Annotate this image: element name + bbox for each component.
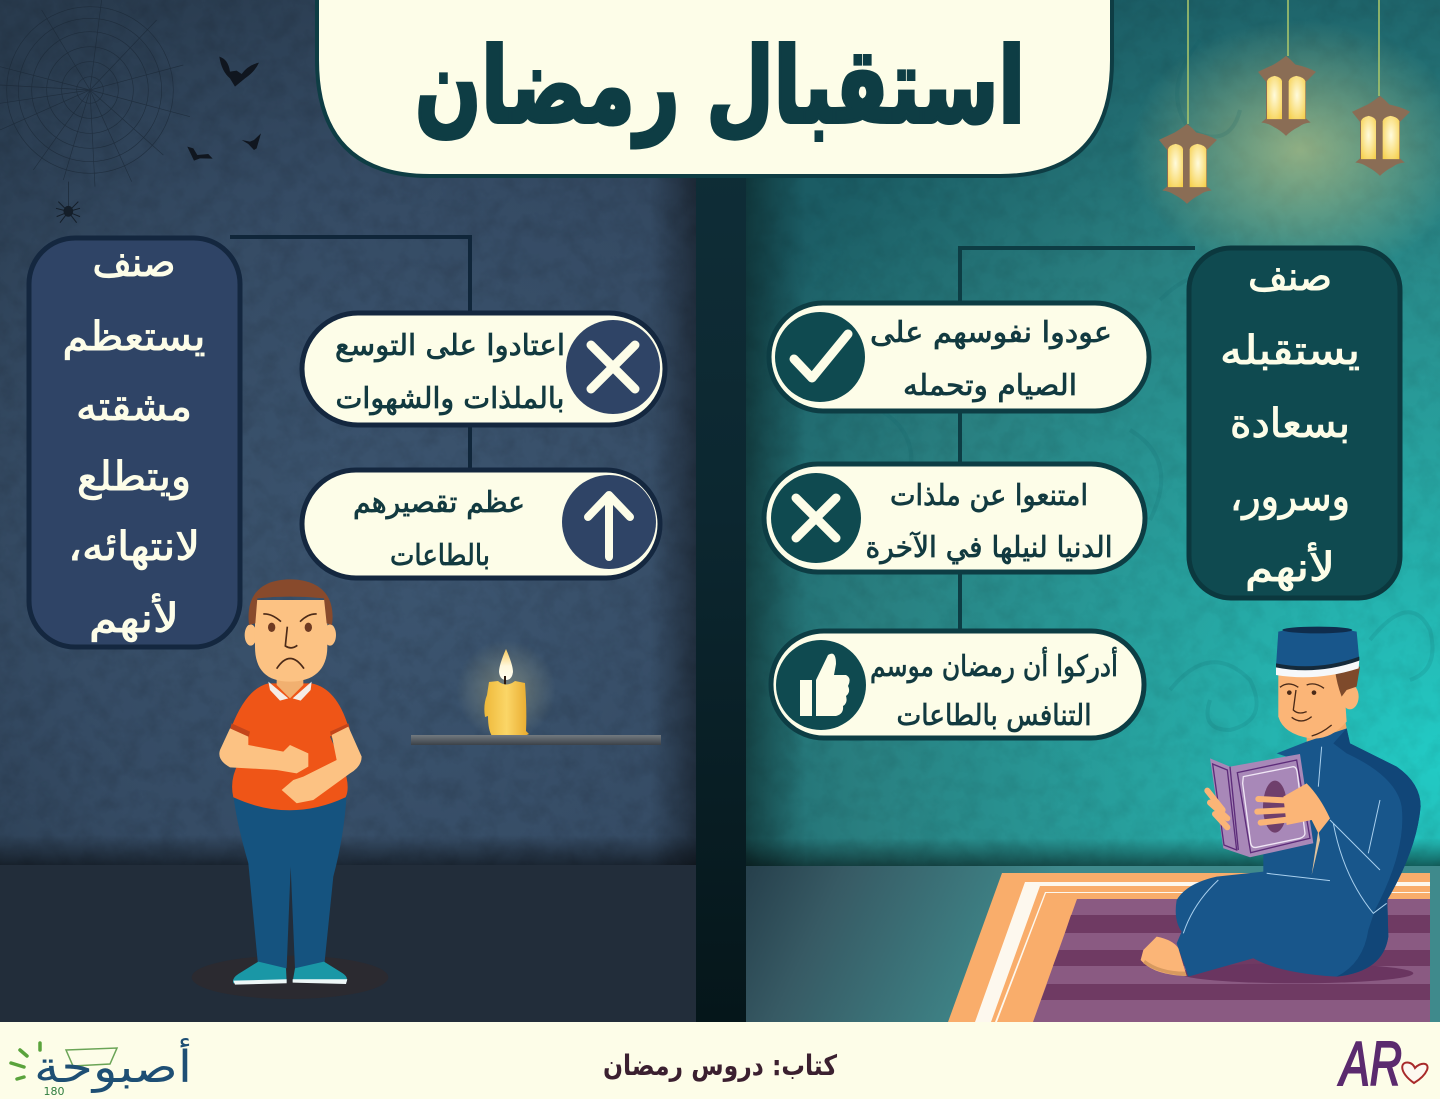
right floor [746, 866, 1440, 1022]
icon: spider [56, 182, 80, 223]
logo: left brand [11, 1038, 192, 1098]
icon: bats [187, 57, 261, 161]
pill: left item 1: بالملذات والشهوات [336, 381, 564, 415]
pill: right item 2: الدنيا لنيلها في الآخرة [866, 530, 1112, 565]
figure: man reading book [1141, 627, 1421, 983]
title: استقبال رمضان [415, 25, 1025, 147]
icon: lantern 2 [1258, 56, 1316, 136]
right teal wall [746, 0, 1440, 866]
connector lines left [230, 237, 470, 475]
pill: right item 2: امتنعوا عن ملذات [890, 478, 1088, 512]
panel: left category box [29, 238, 240, 647]
title plate [317, 0, 1112, 176]
logo: left brand: 180 [44, 1085, 64, 1098]
panel: left category box: صنف [92, 240, 176, 286]
lantern strings [1188, 0, 1379, 124]
central dark divider [696, 0, 746, 1022]
panel: left category box: يستعظم [62, 314, 205, 360]
left dark wall [0, 0, 697, 865]
panel: right category box [1189, 248, 1400, 598]
pill: left item 2: بالطاعات [390, 538, 490, 572]
panel: left category box: مشقته [76, 384, 192, 430]
candle on shelf [411, 640, 661, 745]
source text: كتاب: دروس رمضان [603, 1049, 838, 1082]
pill: left item 2: عظم تقصيرهم [353, 485, 525, 520]
pill: right item 3: أدركوا أن رمضان موسم [870, 646, 1118, 684]
panel: left category box: ويتطلع [77, 454, 191, 500]
footer band [0, 1022, 1440, 1099]
panel: right category box: يستقبله [1220, 328, 1360, 374]
pill: right item 3: التنافس بالطاعات [896, 698, 1092, 732]
carpet [948, 873, 1430, 1022]
panel: right category box: بسعادة [1230, 401, 1350, 447]
icon: lantern 1 [1159, 124, 1217, 204]
pill: right item 1: الصيام وتحمله [903, 368, 1077, 402]
panel: right category box: وسرور، [1230, 474, 1350, 520]
pill: right item 1: عودوا نفوسهم على [870, 315, 1112, 350]
panel: right category box: لأنهم [1245, 542, 1335, 591]
icon: lantern 3 [1352, 96, 1410, 176]
connector lines right [960, 248, 1195, 640]
panel: left category box: لأنهم [89, 593, 179, 642]
pill: right item 1 [769, 303, 1149, 411]
shelf [411, 735, 661, 745]
pill: left item 1: اعتادوا على التوسع [335, 328, 565, 362]
pill: left item 1 [302, 313, 665, 425]
figure: sad overweight man [192, 579, 388, 999]
panel: left category box: لانتهائه، [68, 524, 200, 570]
pill: right item 3 [771, 631, 1144, 738]
spider web [0, 0, 190, 187]
pill: left item 2 [302, 470, 660, 578]
pill: right item 2 [764, 464, 1145, 572]
logo: AR heart: AR [1337, 1030, 1402, 1099]
logo: left brand: أصبوحة [34, 1038, 192, 1093]
panel: right category box: صنف [1248, 254, 1332, 300]
left floor [0, 865, 697, 1022]
